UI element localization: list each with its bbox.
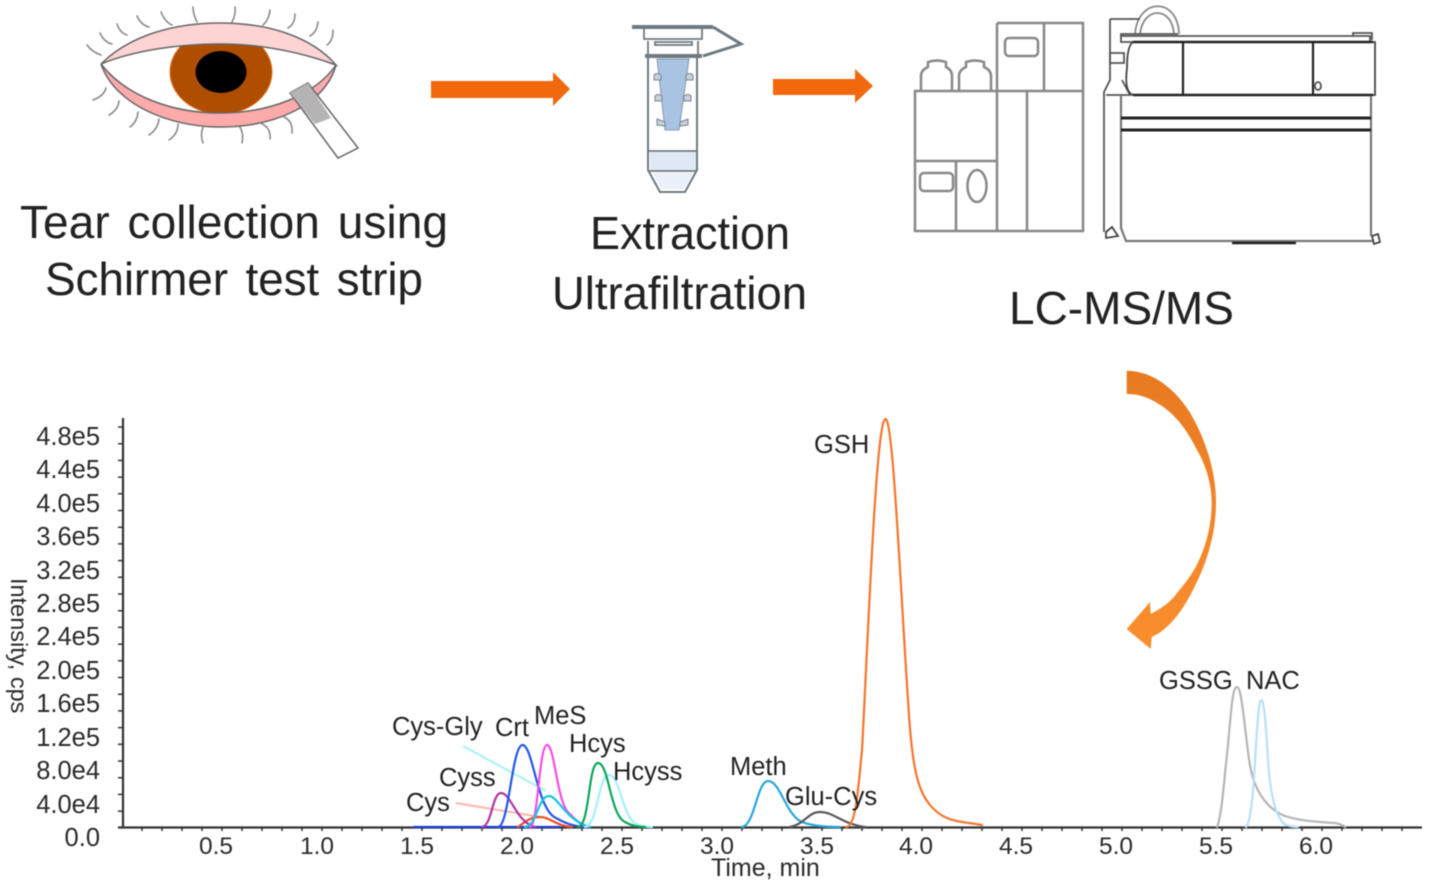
y axis labels: 2.0e5	[36, 657, 100, 685]
x axis labels: 4.5	[999, 833, 1033, 860]
y axis labels: 4.0e5	[36, 490, 100, 518]
y axis labels: 1.2e5	[36, 724, 100, 752]
peak labels: Meth	[730, 753, 787, 781]
filter insert	[657, 59, 689, 130]
y axis labels: 3.6e5	[36, 523, 100, 551]
y axis labels: 0.0	[65, 824, 100, 852]
heading: extraction and ultrafiltration: Ultrafiltration	[552, 267, 807, 319]
peak: MeS	[530, 745, 588, 827]
peak labels: Cys	[406, 789, 450, 817]
x axis labels: 0.5	[199, 833, 233, 860]
LC modules	[915, 23, 1083, 231]
x axis title: Time, min	[711, 854, 820, 882]
heading: extraction and ultrafiltration: Extraction	[590, 207, 790, 259]
y axis labels: 3.2e5	[36, 557, 100, 585]
icon: ultrafiltration tube	[632, 27, 741, 192]
heading: tear collection: Schirmer test strip	[45, 253, 423, 305]
peak: Cys	[518, 817, 572, 827]
axes	[118, 418, 1422, 831]
peak: Glu-Cys	[790, 812, 865, 827]
peak: GSH	[846, 419, 982, 827]
iris	[170, 30, 272, 114]
peak labels: Hcys	[569, 730, 626, 758]
x axis labels: 3.5	[800, 833, 834, 860]
peak labels: Cyss	[439, 764, 496, 792]
peak: Cys-Gly pointer line	[463, 746, 546, 791]
peak: Cys-Gly	[525, 796, 590, 827]
baseline traces	[414, 826, 560, 828]
arrow: eye to extraction	[431, 72, 570, 106]
y axis labels: 4.0e4	[36, 791, 100, 819]
y axis labels: 1.6e5	[36, 690, 100, 718]
x axis labels: 6.0	[1299, 833, 1333, 860]
arrow: extraction to LC-MS	[773, 69, 873, 103]
peak labels: Hcyss	[613, 758, 682, 786]
peak labels	[392, 431, 1300, 817]
x axis labels: 1.5	[400, 833, 434, 860]
icon: LC instrument	[915, 23, 1083, 231]
peak labels: NAC	[1246, 667, 1300, 695]
peak: Hcyss	[585, 775, 652, 827]
icon: mass spectrometer	[1104, 6, 1380, 244]
x axis labels: 2.0	[500, 833, 534, 860]
filtrate	[650, 152, 696, 170]
peak: Crt	[498, 745, 585, 827]
peak: Cys pointer line	[456, 803, 540, 817]
peak labels: GSSG	[1159, 667, 1233, 695]
heading: LC-MS/MS: LC-MS/MS	[1009, 282, 1234, 334]
x axis labels: 2.5	[600, 833, 634, 860]
heading: tear collection: Tear collection using	[20, 196, 448, 248]
peak: NAC	[1246, 700, 1298, 827]
x axis labels: 3.0	[700, 833, 734, 860]
lower eyelid	[101, 64, 336, 127]
filter insert pegs	[654, 74, 693, 126]
heading: extraction and ultrafiltration	[552, 207, 807, 319]
chromatogram	[6, 418, 1422, 882]
curved arrow	[1127, 371, 1216, 649]
y axis labels: 4.4e5	[36, 456, 100, 484]
tube body	[648, 57, 697, 192]
x axis labels: 4.0	[899, 833, 933, 860]
eyelashes	[87, 7, 333, 143]
y axis labels: 4.8e5	[36, 423, 100, 451]
peak labels: Cys-Gly	[392, 713, 483, 741]
solvent bottles	[921, 60, 991, 90]
y axis labels: 2.4e5	[36, 623, 100, 651]
upper eyelid	[101, 23, 336, 65]
peak: Cyss	[482, 793, 535, 827]
y axis labels: 2.8e5	[36, 590, 100, 618]
icon: eye with Schirmer strip	[87, 7, 358, 158]
peak labels: MeS	[534, 702, 586, 730]
x axis labels	[199, 833, 1333, 860]
x axis labels: 5.0	[1099, 833, 1133, 860]
x axis labels: 5.5	[1199, 833, 1233, 860]
y axis title: Intensity, cps	[6, 578, 32, 713]
peak: Hcys	[578, 763, 645, 827]
x axis labels: 1.0	[300, 833, 334, 860]
y axis labels	[36, 423, 100, 852]
y axis labels: 8.0e4	[36, 757, 100, 785]
peak labels: GSH	[814, 431, 869, 459]
peak labels: Glu-Cys	[785, 783, 877, 811]
pupil	[196, 51, 246, 93]
cap	[632, 27, 741, 56]
test strip	[290, 83, 358, 158]
peak labels: Crt	[495, 714, 529, 742]
heading: tear collection	[20, 196, 448, 305]
peak: Meth	[742, 781, 840, 827]
peak: GSSG	[1217, 687, 1345, 827]
